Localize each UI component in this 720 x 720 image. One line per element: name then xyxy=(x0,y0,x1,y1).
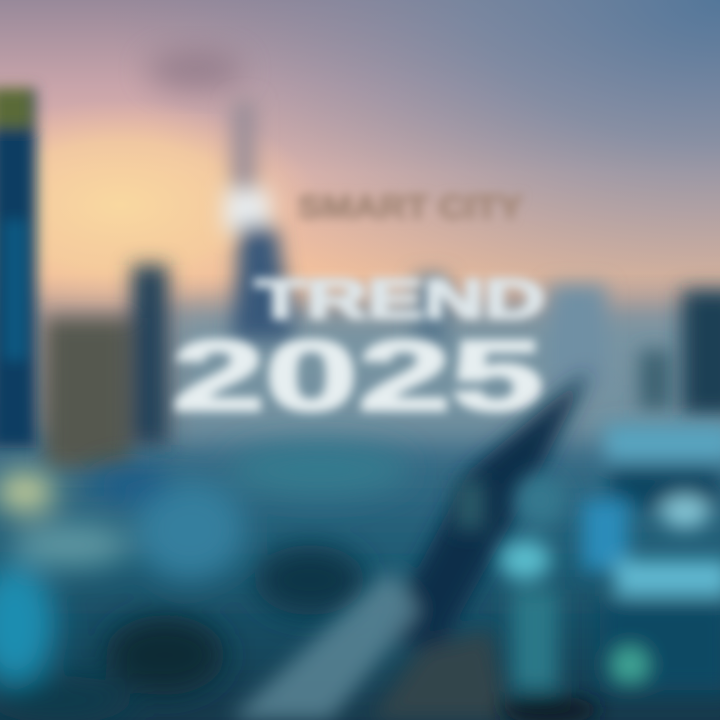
small heading text: SMART CITY xyxy=(298,189,522,225)
right tower xyxy=(682,290,720,415)
central dark road xyxy=(230,370,590,720)
left street lights xyxy=(0,444,410,720)
right building complex xyxy=(582,425,720,690)
year 2025: 2025 xyxy=(172,320,544,432)
ground and street area xyxy=(0,310,720,720)
central spire tower xyxy=(224,100,294,340)
right road lights xyxy=(455,474,600,720)
left tower xyxy=(0,88,36,448)
title band: TREND xyxy=(255,267,545,330)
distant skyline buildings xyxy=(45,265,670,468)
smoke plume xyxy=(147,50,243,90)
